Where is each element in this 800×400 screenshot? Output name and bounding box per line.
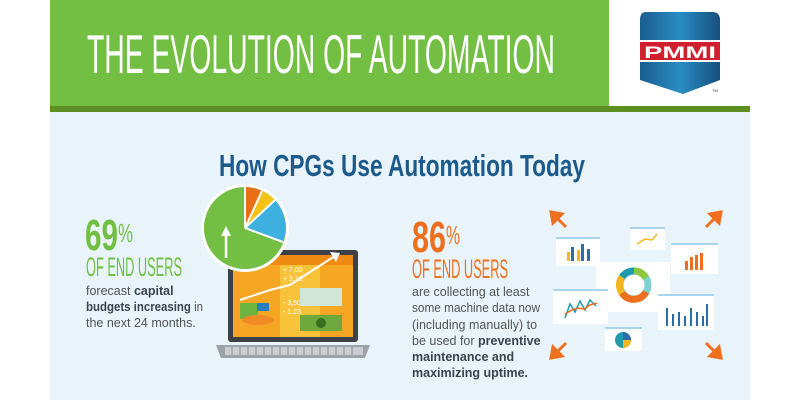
stat block: 86%: maintenance and <box>412 350 514 364</box>
cards <box>556 237 600 266</box>
stat block: 86% <box>412 213 541 380</box>
illustration: laptop with pie chart: + 2,10 <box>283 276 303 283</box>
stat block: 86%: are collecting at least <box>412 285 530 299</box>
stat block: 86%: % <box>446 220 460 250</box>
header band <box>50 0 750 112</box>
illustration: data dashboards <box>551 212 721 358</box>
stat block: 86%: OF END USERS <box>412 254 508 284</box>
arrows <box>551 212 721 358</box>
center donut card <box>596 262 670 312</box>
stat block: 86%: (including manually) to <box>412 318 537 332</box>
stat block: 69%: OF END USERS <box>86 252 182 282</box>
illustration: laptop with pie chart <box>201 184 370 358</box>
stat block: 69%: % <box>118 218 133 248</box>
illustration: laptop with pie chart: - 1,23 <box>283 309 301 316</box>
content panel background <box>50 112 750 400</box>
stat block: 86%: 86 <box>412 213 446 262</box>
stat block: 86%: some machine data now <box>412 301 541 315</box>
stat block: 69%: the next 24 months. <box>86 316 196 330</box>
logo: PMMI shield <box>640 12 720 94</box>
stat block: 69%: 69 <box>85 211 118 260</box>
logo: PMMI shield: TM <box>712 88 718 93</box>
stat block: 69%: budgets increasing in <box>86 300 203 314</box>
stat block: 86%: be used for preventive <box>412 334 541 348</box>
illustration: laptop with pie chart: + 7,00 <box>283 267 303 274</box>
illustration: laptop with pie chart: - 3,50 <box>283 300 301 307</box>
subtitle: How CPGs Use Automation Today <box>219 148 586 183</box>
stat block: 69%: forecast capital <box>86 284 174 298</box>
logo: PMMI shield: PMMI <box>644 43 716 62</box>
stat block: 69% <box>85 211 203 330</box>
stat block: 86%: maximizing uptime. <box>412 366 528 380</box>
